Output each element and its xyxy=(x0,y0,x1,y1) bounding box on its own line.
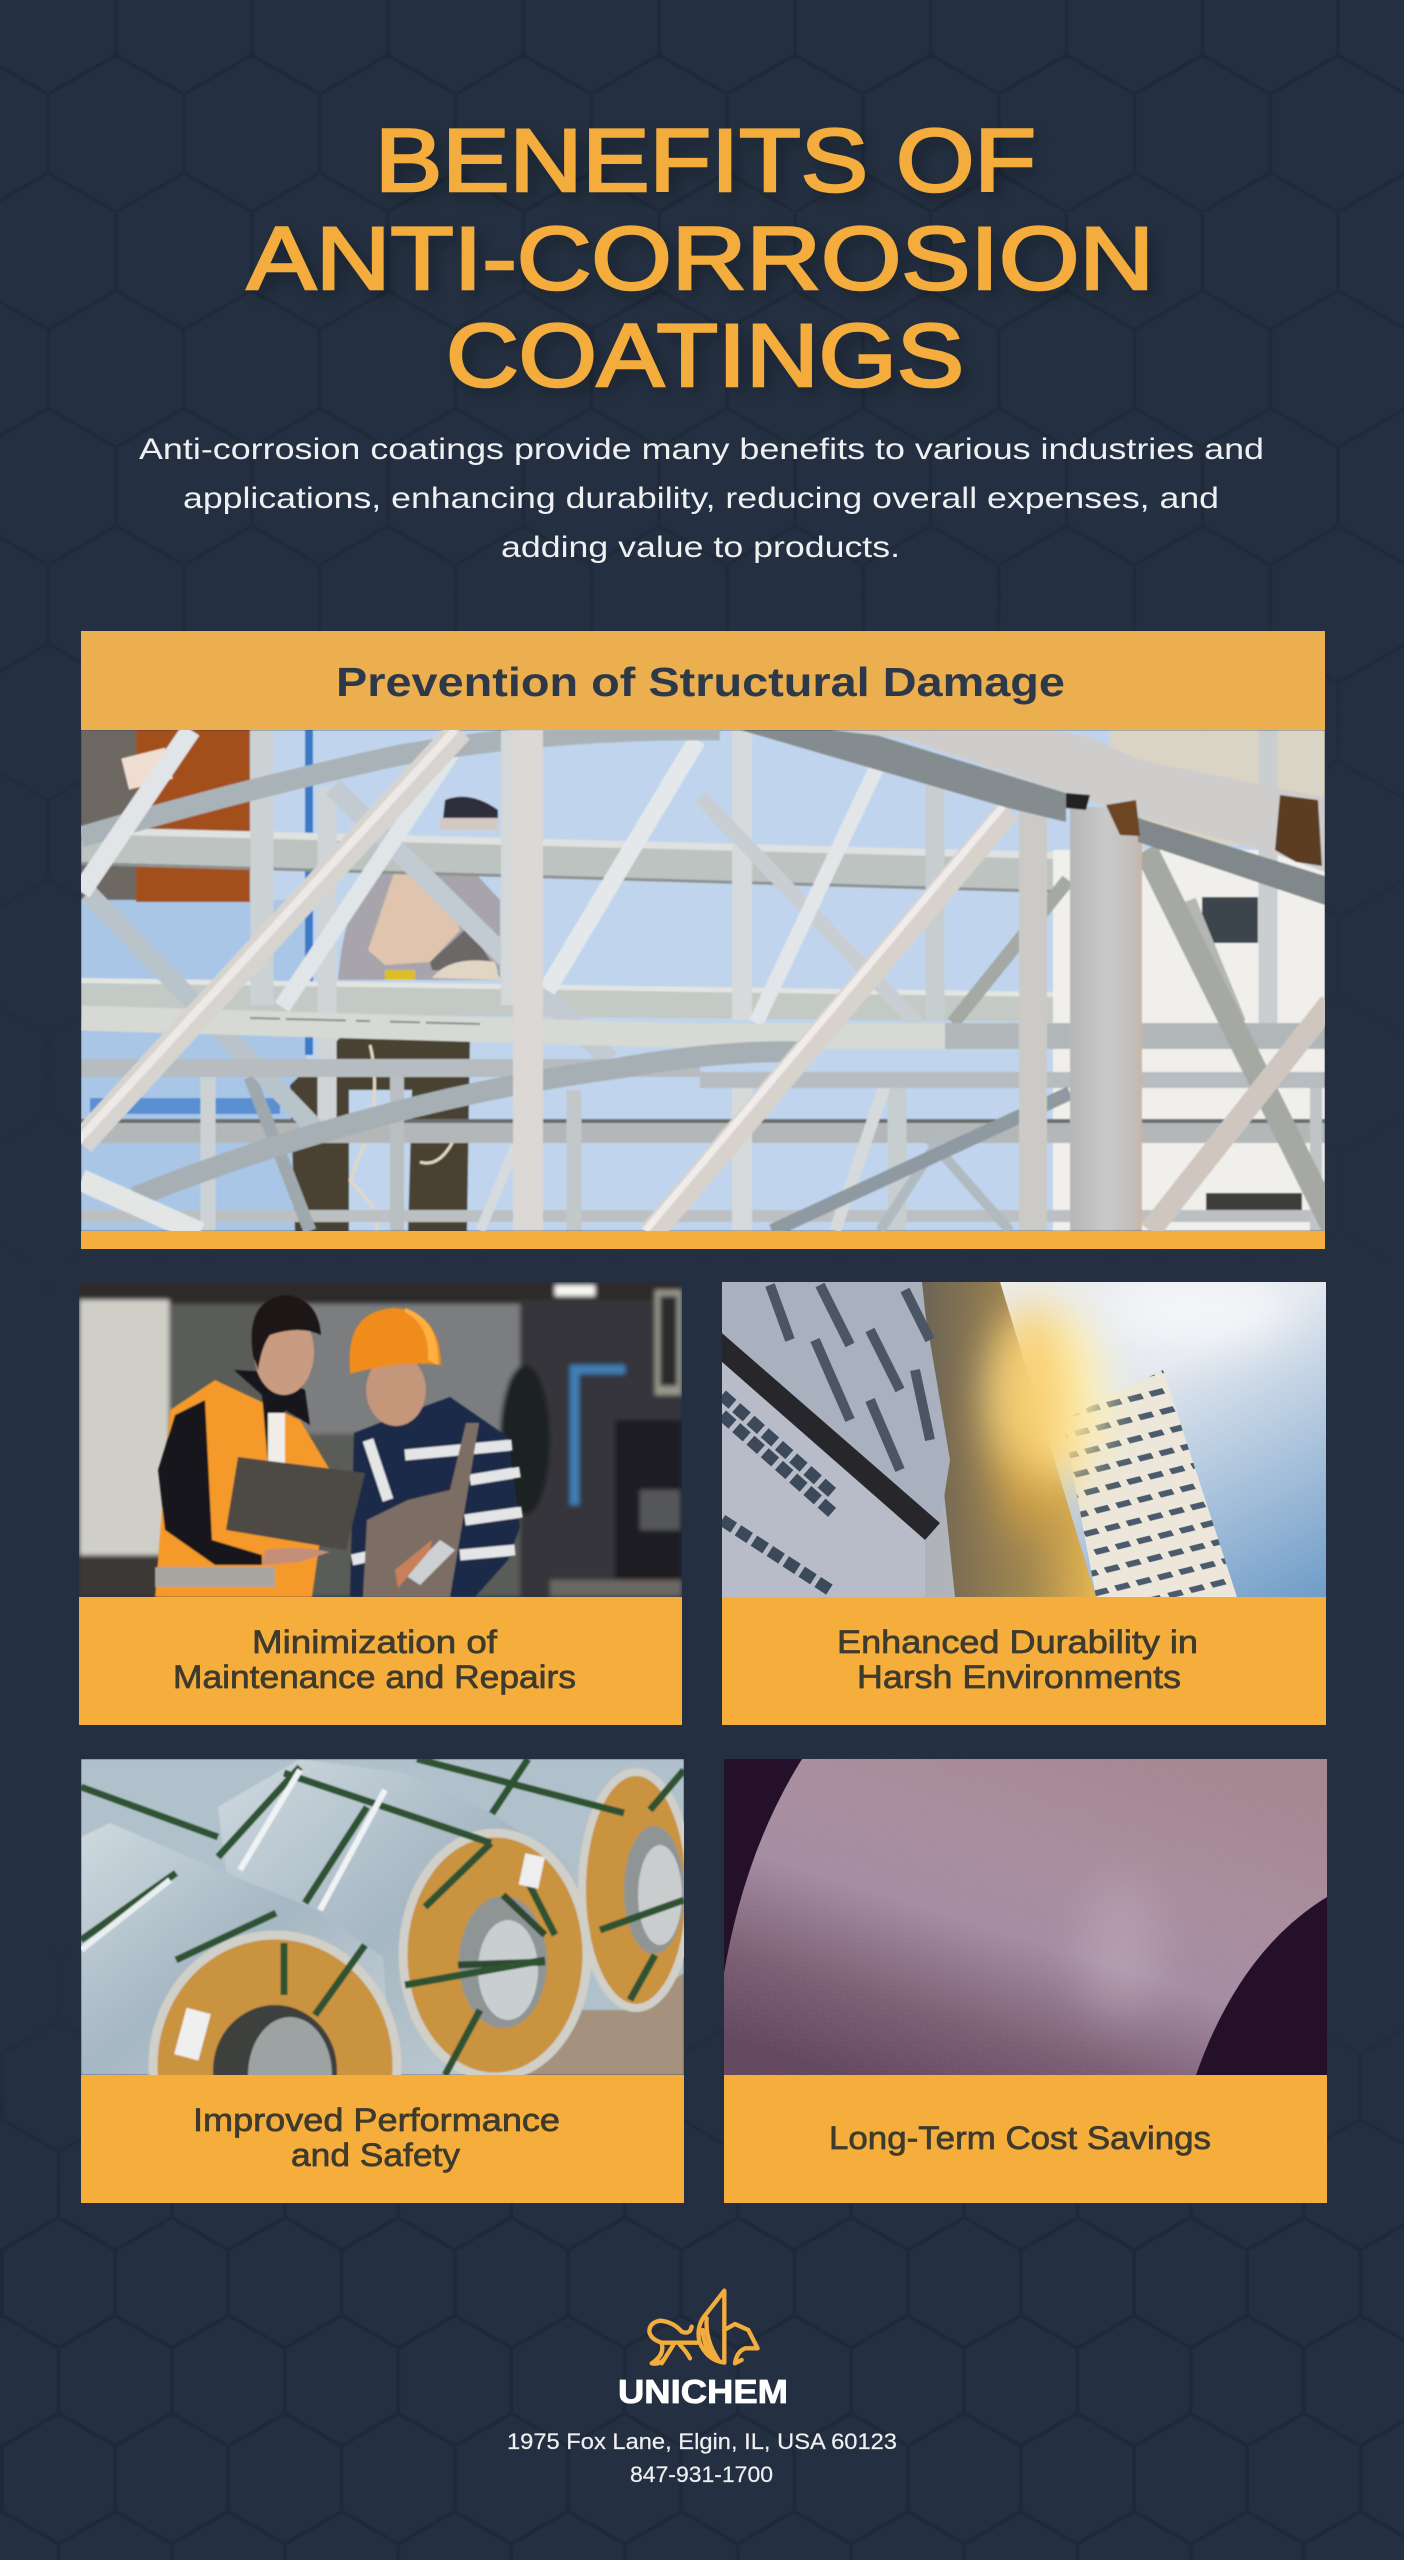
label text: Maintenance and Repairs xyxy=(173,1659,576,1695)
large tubes xyxy=(76,730,1335,1235)
footer xyxy=(507,2291,897,2487)
main pipes xyxy=(81,1018,945,1036)
label bar xyxy=(81,2075,684,2203)
front coil xyxy=(81,1823,392,2075)
title: COATINGS xyxy=(446,305,964,405)
panel heading: prevention of structural damage: Prevention of Structural Damage xyxy=(336,659,1065,705)
back beams xyxy=(81,827,1053,890)
label text: and Safety xyxy=(291,2137,460,2173)
card: minimization of maintenance and repairs xyxy=(79,1282,682,1725)
rust spots xyxy=(1275,795,1322,866)
label text xyxy=(173,1624,576,1695)
title xyxy=(247,110,1154,405)
laptop xyxy=(226,1457,365,1550)
person 2 xyxy=(350,1397,520,1597)
photo: steel truss with worker xyxy=(76,730,1335,1235)
title: ANTI-CORROSION xyxy=(247,208,1154,308)
panel heading: prevention of structural damage xyxy=(81,631,1325,730)
card: improved performance and safety xyxy=(81,1759,690,2203)
label text: Improved Performance xyxy=(193,2102,560,2138)
worker xyxy=(290,797,500,1231)
small verticals and braces xyxy=(88,730,1316,1231)
right coil xyxy=(585,1775,684,2005)
intro paragraph: applications, enhancing durability, reducing overall expenses, and xyxy=(183,482,1219,515)
address: 1975 Fox Lane, Elgin, IL, USA 60123 xyxy=(507,2429,897,2454)
card: long-term cost savings xyxy=(724,1759,1327,2203)
photo: high-rise buildings against the sun xyxy=(722,1275,1326,1597)
top beam xyxy=(740,730,1066,822)
label text xyxy=(837,1624,1198,1695)
intro paragraph: Anti-corrosion coatings provide many benefits to various industries and xyxy=(139,433,1264,466)
label bar xyxy=(724,2075,1327,2203)
middle coil xyxy=(218,1759,516,2074)
label text: Harsh Environments xyxy=(857,1659,1181,1695)
label bar xyxy=(722,1597,1326,1725)
photo: two workers with laptop xyxy=(79,1282,682,1597)
icon: griffin logo xyxy=(649,2291,758,2364)
phone: 847-931-1700 xyxy=(630,2462,773,2487)
background with hexagon pattern xyxy=(0,2222,1374,2541)
label text xyxy=(193,2102,560,2173)
label text: Long-Term Cost Savings xyxy=(829,2120,1211,2156)
intro paragraph: adding value to products. xyxy=(501,531,900,564)
panel bottom bar xyxy=(81,1231,1325,1249)
title: BENEFITS OF xyxy=(375,110,1036,210)
label bar xyxy=(79,1597,682,1725)
person 1 xyxy=(155,1380,330,1597)
label text: Enhanced Durability in xyxy=(837,1624,1198,1660)
card: enhanced durability in harsh environments xyxy=(722,1275,1326,1725)
wordmark: UNICHEM xyxy=(618,2373,788,2410)
photo: metal sheet roll xyxy=(724,1759,1327,2075)
label text: Minimization of xyxy=(252,1624,497,1660)
intro paragraph xyxy=(139,433,1264,564)
photo: steel coils xyxy=(81,1759,684,2075)
panel: prevention of structural damage xyxy=(76,631,1335,1249)
